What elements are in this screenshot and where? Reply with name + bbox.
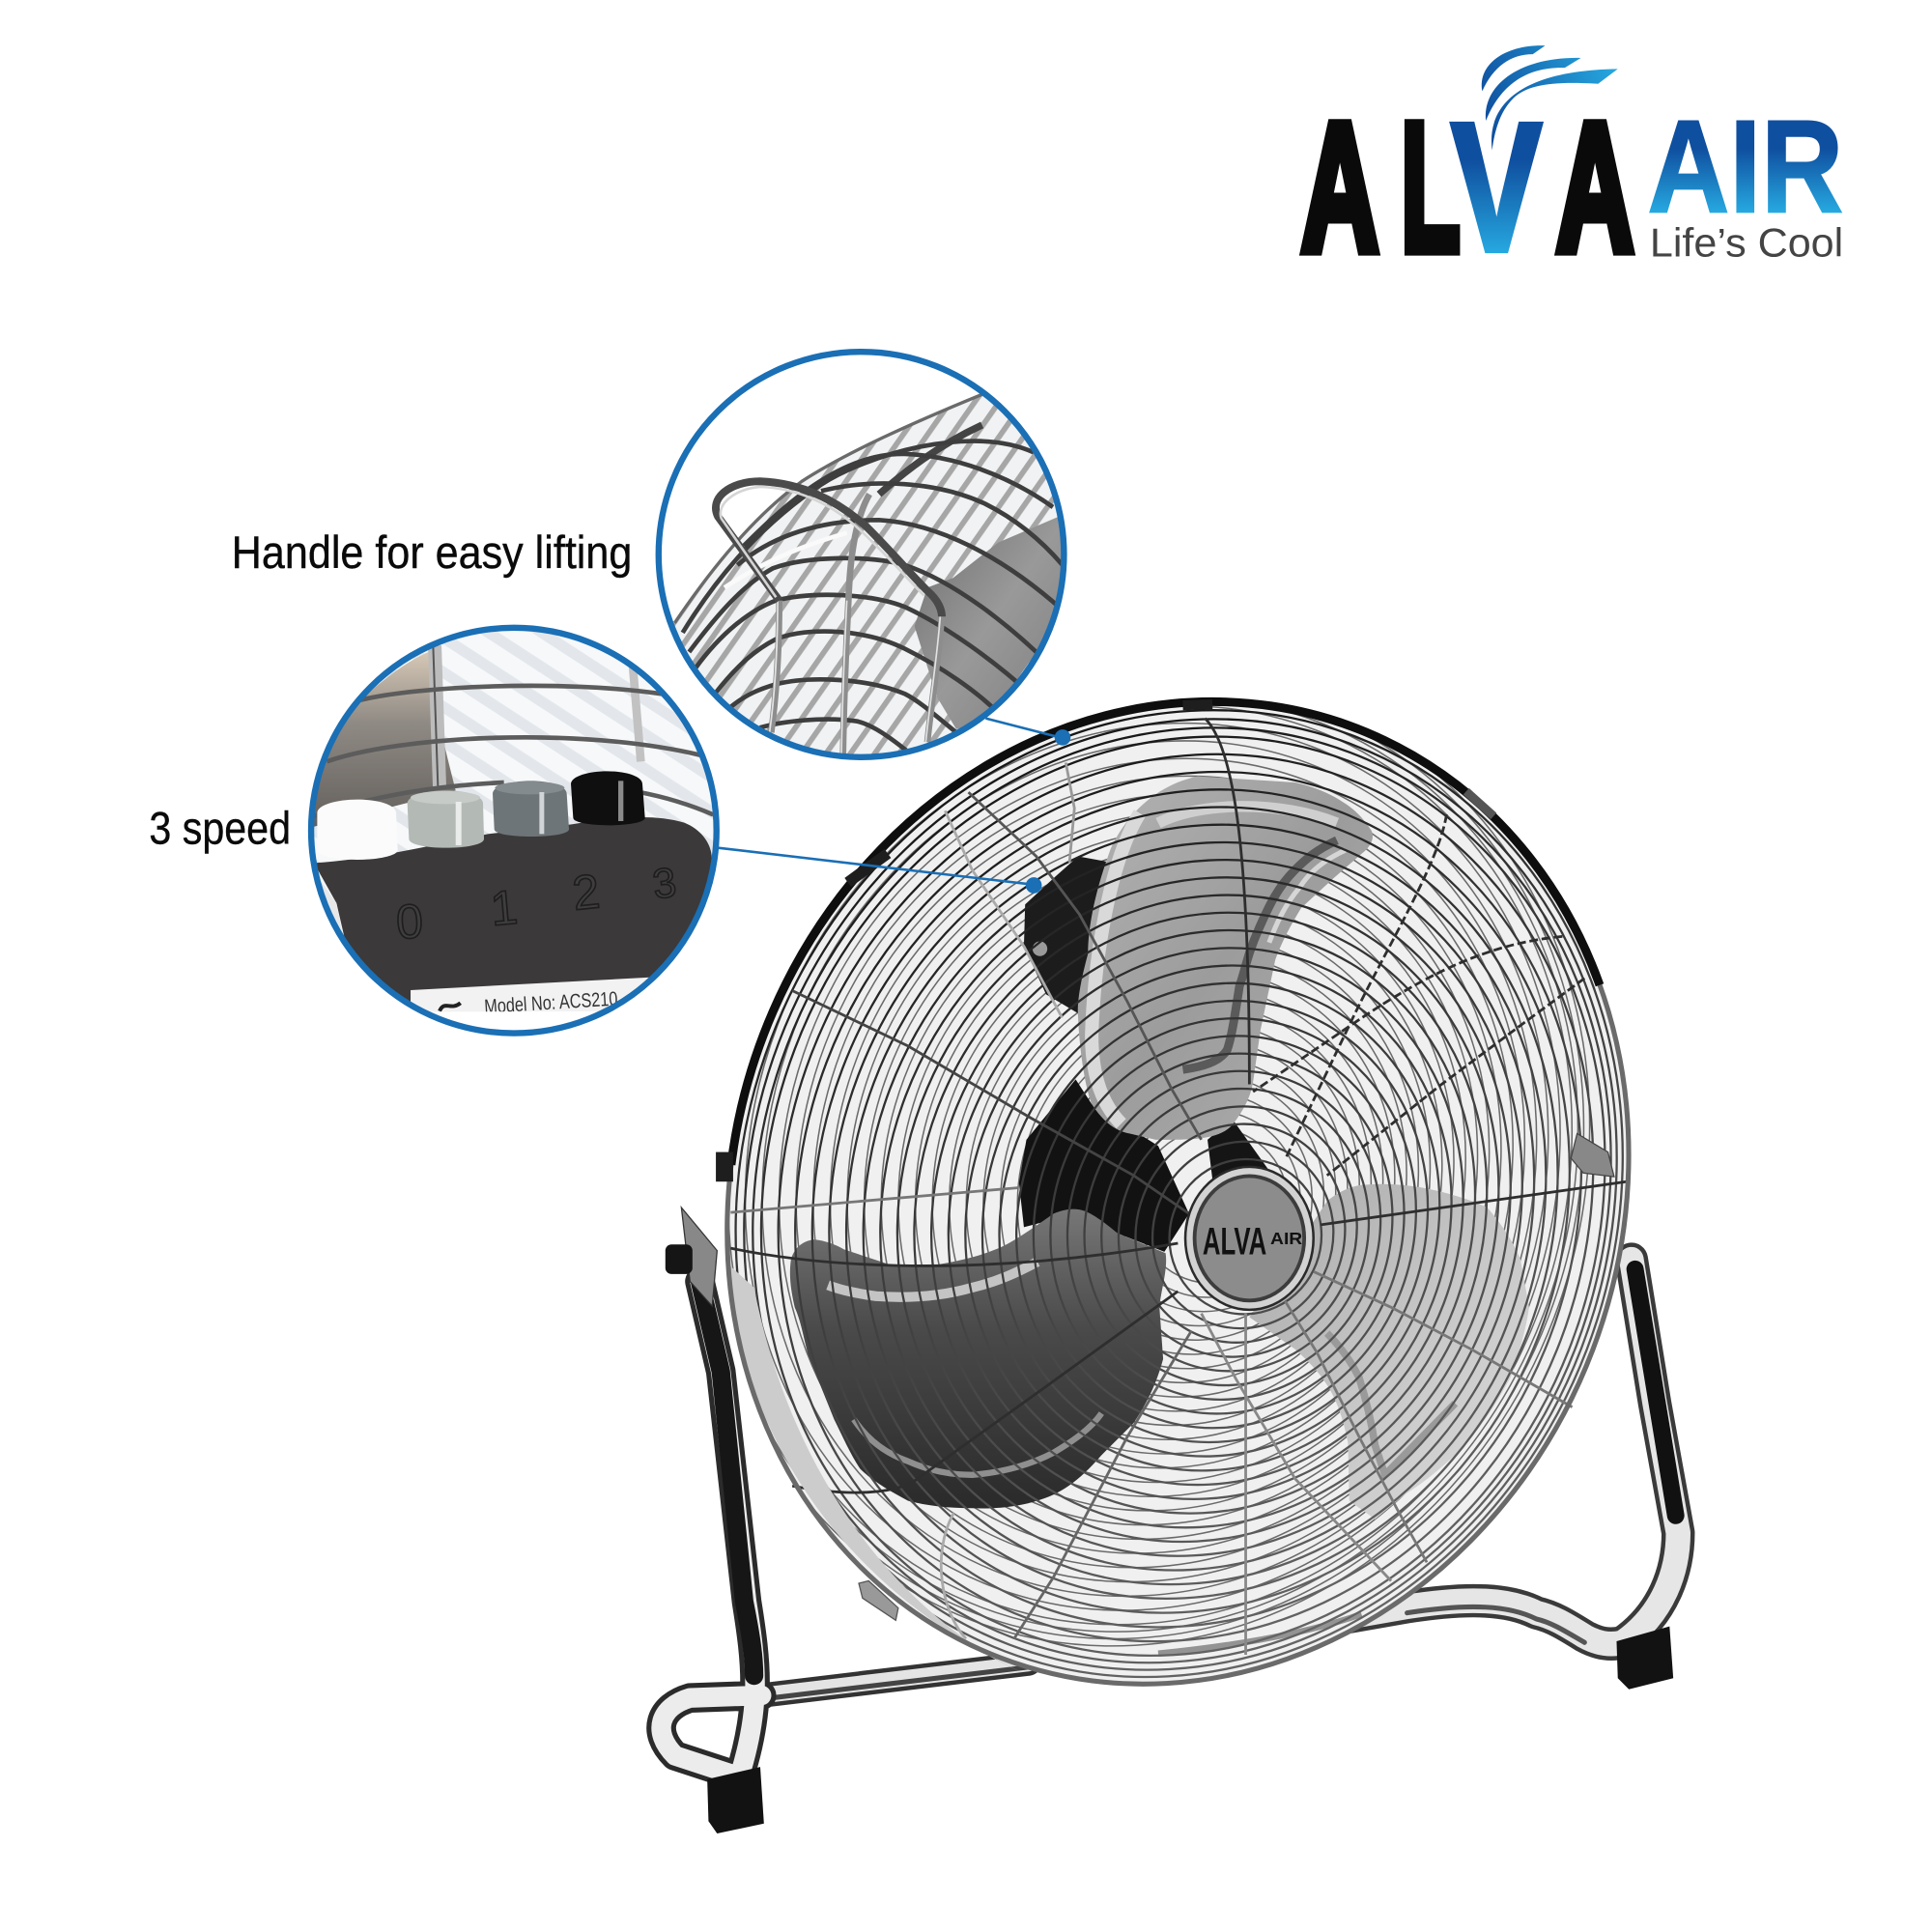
blade rib shadow — [1327, 1333, 1455, 1475]
right foot — [1616, 1627, 1673, 1690]
blade left bright edge — [1092, 813, 1140, 1123]
left foot — [707, 1767, 764, 1833]
logo tagline: Life’s Cool — [1650, 219, 1843, 265]
logo wordmark ALVA — [1301, 86, 1634, 290]
left leg and foot loop — [662, 1282, 761, 1776]
right latch — [1571, 1133, 1614, 1177]
fan housing behind handle — [915, 514, 1069, 729]
bright cross wires — [724, 533, 847, 587]
model label — [411, 978, 649, 1012]
logo wings icon — [1482, 45, 1618, 151]
hub logo text: ALVA — [1203, 1220, 1266, 1263]
blade rib — [1182, 840, 1337, 1069]
rim chrome — [586, 570, 1770, 1815]
handle — [716, 481, 942, 616]
cage backing — [586, 570, 1770, 1815]
base rear bar left — [761, 1663, 1029, 1699]
lower left tab — [859, 1580, 898, 1620]
speed numbers on box: 3 — [650, 860, 679, 908]
callout: handle leader line — [985, 719, 1070, 746]
speed numbers on box: 0 — [395, 894, 424, 950]
rim black band — [731, 701, 1600, 1165]
blade rib highlight — [828, 1262, 1037, 1297]
control box — [317, 817, 712, 1001]
speed numbers on box — [397, 867, 676, 939]
arc wires — [314, 686, 713, 816]
spokes — [730, 719, 1627, 1655]
right leg and rear bar — [1293, 1260, 1678, 1644]
lower left side band — [727, 1263, 1029, 1676]
tilt knob and bracket — [666, 1208, 717, 1306]
logo wordmark ALVA: A — [1556, 86, 1634, 290]
motor: upper housing — [1024, 856, 1112, 1014]
blade top bright band — [1158, 807, 1337, 823]
vertical wire highlights — [770, 601, 940, 758]
label: handle: Handle for easy lifting — [232, 527, 632, 579]
blade: lower right silver — [1249, 1184, 1529, 1520]
callout circle: 3 speed controls — [304, 623, 729, 1055]
fan product photo — [646, 697, 1694, 1833]
fan stand — [662, 1260, 1678, 1776]
knob: grey — [493, 781, 569, 837]
front mesh — [734, 709, 1624, 1679]
vertical wires — [771, 495, 942, 758]
logo wordmark AIR: AIR — [1647, 92, 1843, 240]
callout circle: handle — [647, 352, 1075, 771]
label: 3 speed: 3 speed — [149, 804, 291, 855]
blade rib highlight — [1269, 850, 1346, 943]
vertical wire left — [435, 645, 440, 787]
base tube seen through cage — [1158, 1614, 1361, 1654]
rear mesh — [729, 706, 1590, 1647]
logo wordmark ALVA: V — [1452, 86, 1542, 290]
logo wordmark ALVA: A — [1301, 86, 1378, 290]
blade: lower left dark — [790, 1209, 1166, 1508]
hub logo text small: AIR — [1270, 1229, 1302, 1248]
blurred background stripes — [314, 632, 713, 875]
cage arc wires — [674, 394, 1063, 752]
cage interior with striped blur — [674, 396, 1057, 753]
callout: speed leader line — [717, 848, 1041, 894]
blade: top silver — [1078, 777, 1373, 1140]
label cut-off — [431, 1011, 597, 1030]
motor: lower housing — [1019, 1079, 1189, 1252]
rim clips — [716, 699, 1496, 1181]
motor: shaft shadow — [1208, 1119, 1269, 1189]
knob: off white — [317, 800, 398, 860]
logo wordmark ALVA: L — [1401, 86, 1460, 290]
hub — [1185, 1167, 1314, 1310]
knob: black — [571, 771, 645, 825]
logo: Alva Air — [1301, 45, 1843, 290]
motor screw — [1033, 941, 1047, 956]
vertical wire right — [633, 665, 640, 761]
dark housing shadow — [879, 425, 982, 495]
blade lower highlight — [854, 1413, 1101, 1475]
model text: Model No: ACS210 — [484, 988, 618, 1018]
speed numbers on box: 2 — [570, 864, 602, 921]
vertical wire left core — [433, 645, 438, 787]
knob: light grey — [408, 790, 484, 848]
white wedge left of box — [321, 881, 342, 931]
speed numbers on box: 1 — [488, 880, 520, 936]
label logo glyph — [440, 1003, 461, 1011]
metal blade patch — [304, 652, 456, 829]
